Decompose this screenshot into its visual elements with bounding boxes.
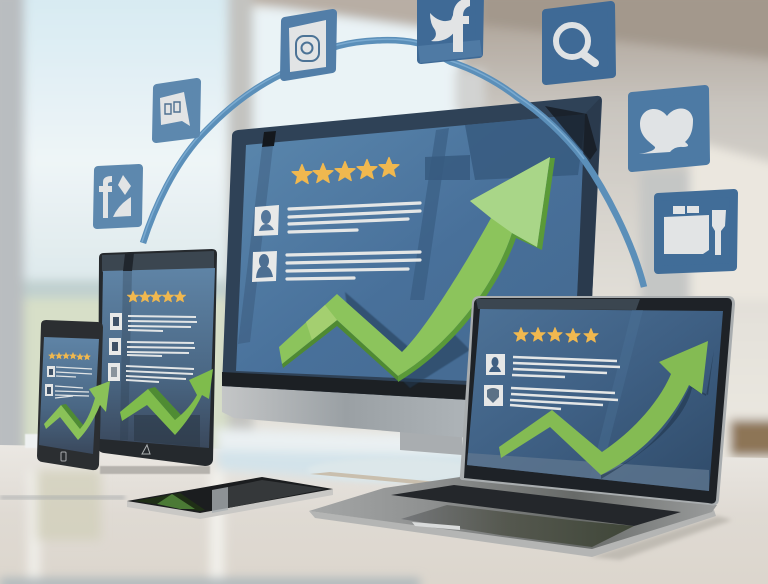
arc connecting social icons [142,39,644,287]
icon: sign tile [156,82,197,139]
laptop keyboard [391,485,681,526]
tablet stars [127,291,186,302]
monitor screen [236,114,587,381]
laptop lid [460,296,735,505]
icon: toolkit tile [658,193,734,270]
phone screen [39,337,99,454]
icon: heart tile [632,89,706,168]
phone home button [61,452,66,461]
phone stars [49,352,90,360]
laptop screen [467,309,723,491]
laptop shadow [590,516,732,560]
tablet review rows [108,313,197,382]
phone upright [37,320,110,470]
tablet rising arrow [120,369,213,435]
monitor stand [400,425,462,455]
tablet home mark [142,445,150,454]
laptop [309,296,735,560]
icon: facebook tile [97,168,139,225]
laptop arrow shadow [601,350,714,479]
tablet body [98,249,217,466]
laptop rising arrow [499,341,708,475]
table top [0,428,768,584]
phone rising arrow [44,381,110,440]
tablet [98,249,217,466]
icon: instagram tile [284,13,333,77]
laptop front lip [309,510,716,557]
laptop review 2 [484,385,618,409]
tablet screen [100,268,215,448]
monitor rising arrow [279,157,555,382]
social icons [97,0,734,270]
phone lying on table [127,477,333,519]
monitor arrow shadow [345,292,470,388]
monitor review 2 [252,251,420,282]
phone review rows [45,366,92,398]
icon: search tile [546,5,612,81]
monitor rating stars [292,158,399,184]
monitor review 1 [254,203,420,236]
laptop base [309,477,717,549]
laptop review 1 [486,354,620,377]
monitor frame [222,96,602,400]
laptop stars [514,328,598,342]
monitor chin [222,380,470,438]
phone body [37,320,103,470]
laptop trackpad [401,505,634,547]
monitor [222,96,602,488]
icon: twitter tile [418,0,482,63]
